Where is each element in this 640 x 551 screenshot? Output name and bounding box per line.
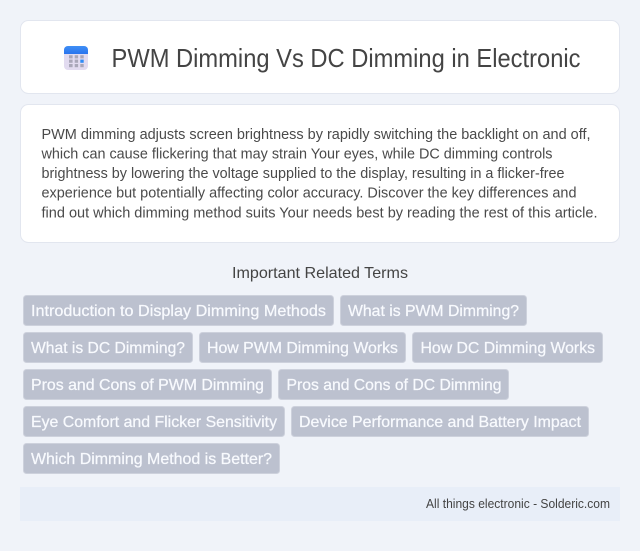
- panel: summary text card: [20, 104, 620, 242]
- footer credit: All things electronic - Solderic.com: [426, 497, 610, 511]
- text block: summary: which can cause flickering that may strain Your eyes, while DC dimming controls: [41, 146, 552, 162]
- heading: important related terms: Important Related Terms: [232, 265, 408, 282]
- chip: what is DC: [24, 332, 192, 362]
- footer: [20, 487, 620, 521]
- chip: pros cons DC: Pros and Cons of DC Dimming: [286, 377, 502, 394]
- chip: introduction: Introduction to Display Dimming Methods: [31, 303, 326, 320]
- chip: device performance: [292, 406, 588, 436]
- chip: how DC works: How DC Dimming Works: [420, 340, 595, 357]
- chip: how DC works: [412, 332, 602, 362]
- chip: how PWM works: How PWM Dimming Works: [207, 340, 398, 357]
- text block: summary: brightness by lowering the voltage supplied to the display, resulting in a flicker-free: [42, 166, 564, 182]
- chip: introduction: [24, 296, 334, 326]
- chip: pros cons PWM: [24, 370, 272, 400]
- chip: pros cons DC: [278, 370, 508, 400]
- text block: summary: experience but potentially affecting color accuracy. Discover the key differences and: [42, 186, 576, 202]
- panel: title card: [20, 20, 620, 94]
- chip: which method: Which Dimming Method is Better?: [31, 451, 272, 468]
- chip: what is DC: What is DC Dimming?: [31, 340, 185, 357]
- chip: eye comfort: Eye Comfort and Flicker Sensitivity: [31, 414, 277, 431]
- chip: pros cons PWM: Pros and Cons of PWM Dimming: [31, 377, 264, 394]
- chip: what is PWM: What is PWM Dimming?: [348, 303, 519, 320]
- chip: what is PWM: [340, 296, 526, 326]
- text block: summary: [41, 127, 598, 221]
- title: PWM Dimming Vs DC Dimming in Electronic: [112, 45, 581, 73]
- chip: eye comfort: [24, 406, 284, 436]
- text block: summary: PWM dimming adjusts screen brightness by rapidly switching the backlight on and off,: [42, 127, 590, 143]
- chip: how PWM works: [200, 332, 406, 362]
- text block: summary: find out which dimming method suits Your needs best by reading the rest of this article.: [42, 205, 598, 221]
- chip: which method: [24, 444, 280, 474]
- icon: calendar: [64, 46, 88, 70]
- panel: term chips: [24, 296, 602, 474]
- chip: device performance: Device Performance and Battery Impact: [299, 414, 582, 431]
